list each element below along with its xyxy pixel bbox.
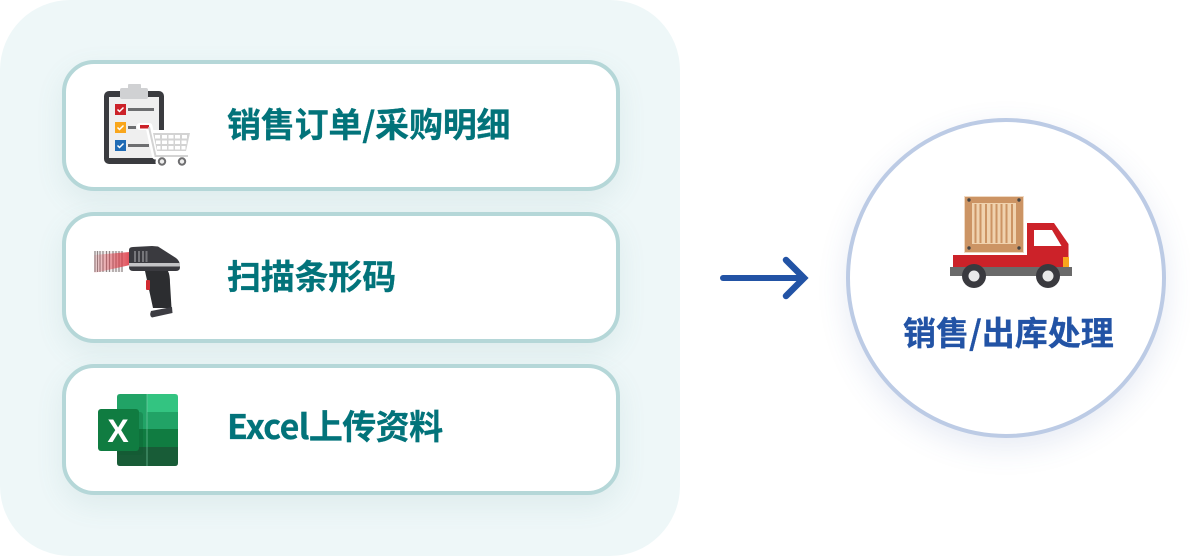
icon: excel	[98, 394, 178, 466]
heading: sales processing: 销售/出库处理	[903, 307, 1114, 355]
heading: sales order: 销售订单/采购明细	[227, 98, 510, 147]
text: X	[107, 413, 129, 449]
heading: excel upload: Excel上传资料	[227, 400, 442, 449]
panel: sales processing circle	[846, 118, 1166, 438]
card: barcode scan	[62, 212, 620, 343]
icon: delivery truck	[950, 196, 1072, 288]
icon: barcode scanner	[94, 246, 180, 318]
arrow	[720, 256, 808, 300]
card: sales order	[62, 60, 620, 191]
icon: clipboard with cart	[104, 84, 190, 166]
heading: barcode scan: 扫描条形码	[227, 250, 396, 299]
card: excel upload	[62, 364, 620, 495]
panel: input sources background	[0, 0, 680, 556]
